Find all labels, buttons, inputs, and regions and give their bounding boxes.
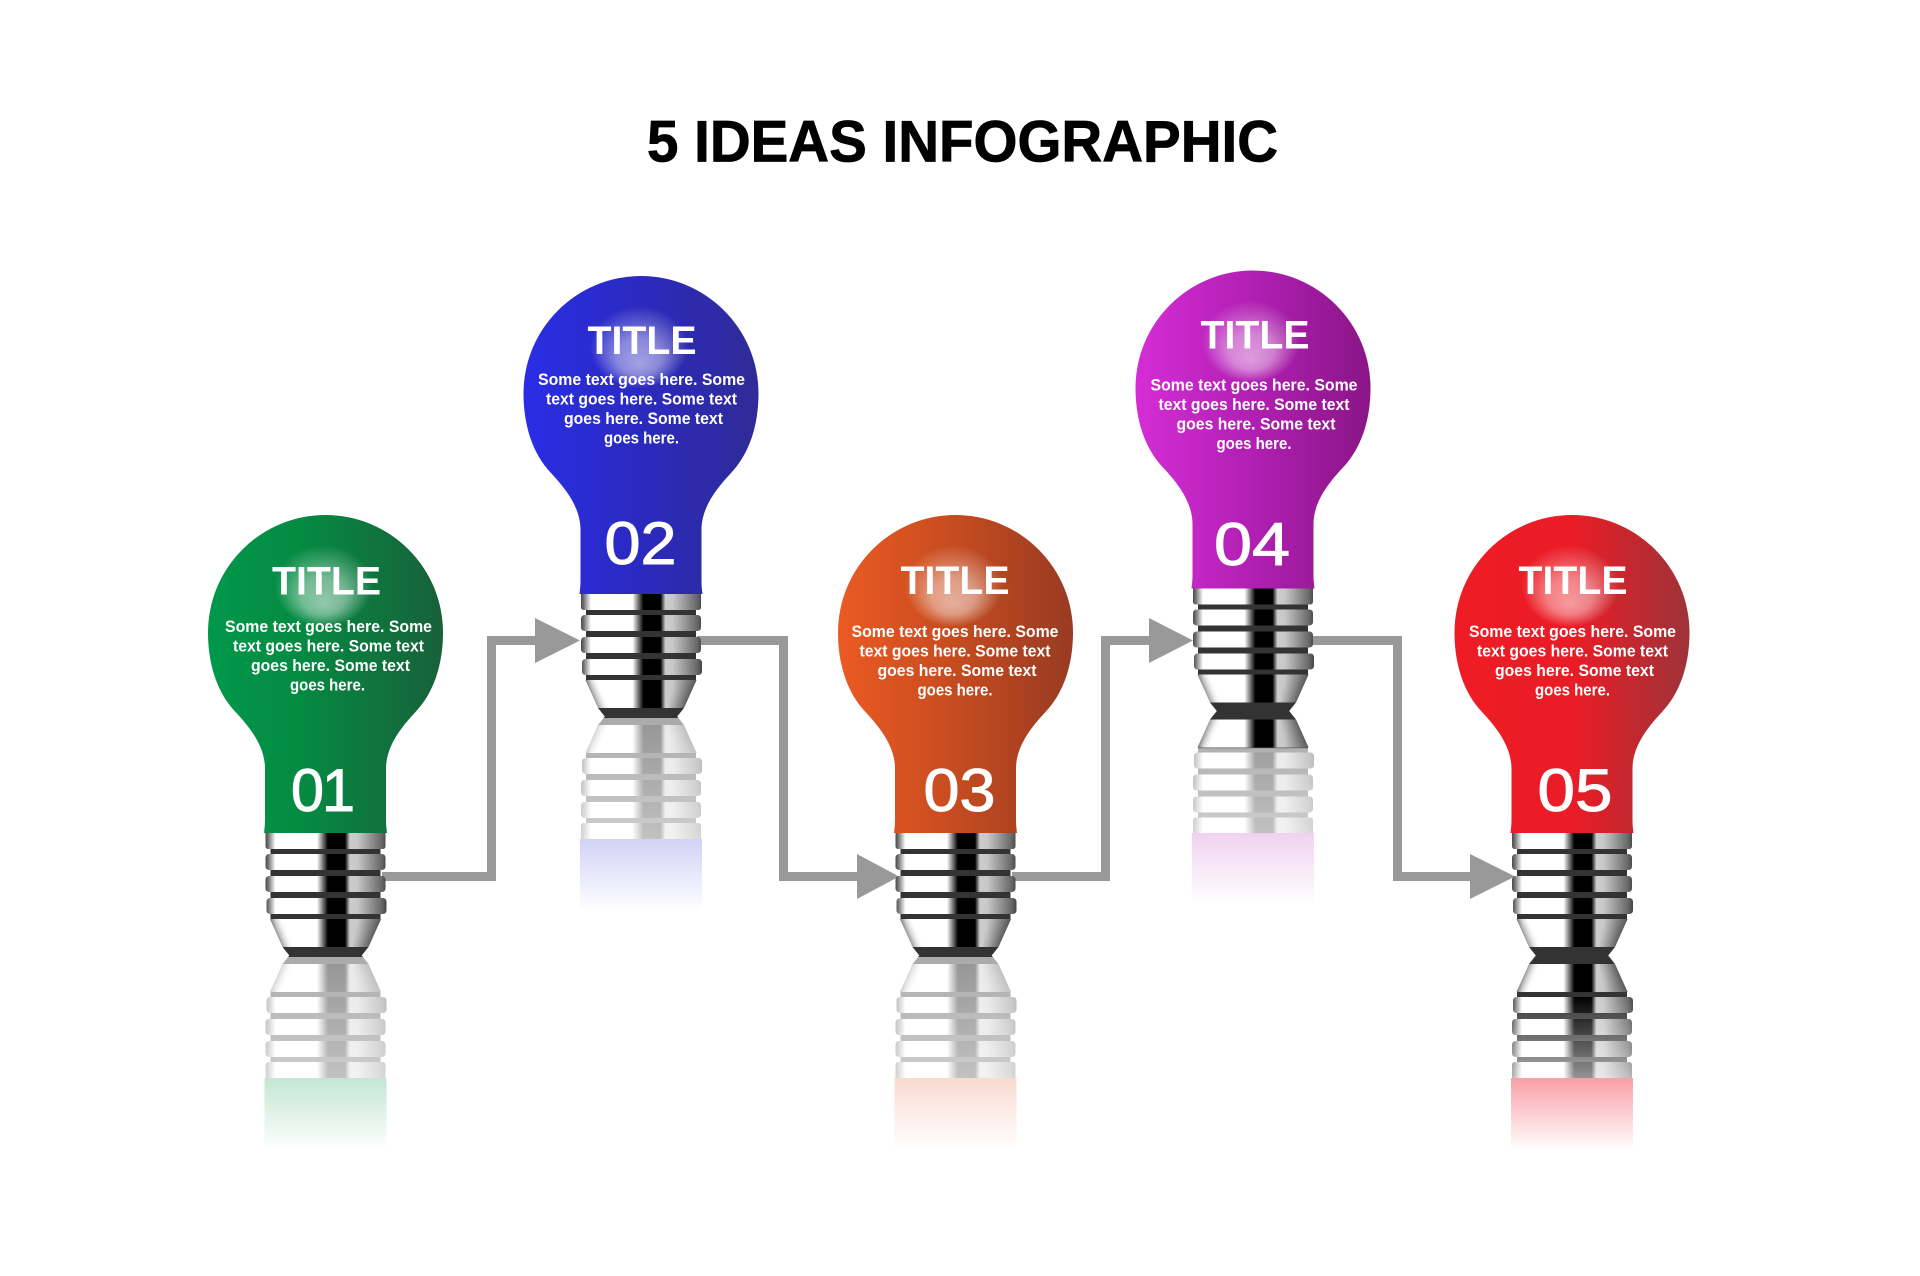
bulb 04 body text: goes here.	[1216, 435, 1292, 453]
bulb 02: blue	[524, 276, 758, 911]
bulb 05 body text	[1469, 623, 1676, 700]
bulb 01: green	[208, 515, 443, 1150]
reflection of bulb 04	[1191, 710, 1315, 905]
reflection of bulb 03	[894, 954, 1018, 1150]
reflection of bulb 02	[579, 715, 703, 911]
bulb 03 body text: Some text goes here. Some	[852, 623, 1058, 641]
bulb 03 body text: text goes here. Some text	[860, 642, 1051, 660]
bulb 05 body text: Some text goes here. Some	[1469, 623, 1676, 641]
bulb 03: orange	[838, 515, 1073, 1150]
bulb 03 body text	[852, 623, 1058, 700]
bulb 04 body text: goes here. Some text	[1176, 416, 1336, 434]
bulb 04 heading: TITLE	[1200, 314, 1310, 358]
number 02: 02	[604, 510, 676, 577]
bulb 04 body and screw base	[1136, 271, 1370, 712]
bulb 05 body text: text goes here. Some text	[1477, 642, 1668, 660]
bulb 04 body text: text goes here. Some text	[1158, 396, 1350, 414]
bulb 03 body and screw base	[838, 515, 1073, 957]
bulb 01 body text: text goes here. Some text	[233, 638, 424, 656]
bulb 01 body text: Some text goes here. Some	[225, 618, 432, 636]
bulb 01 body and screw base	[208, 515, 443, 957]
bulb 02 body text	[538, 371, 745, 448]
bulb 05 body text: goes here. Some text	[1495, 662, 1654, 680]
bulb 05 heading: TITLE	[1518, 559, 1628, 603]
bulb 02 heading: TITLE	[588, 319, 696, 363]
bulb 02 body text: text goes here. Some text	[546, 390, 737, 408]
arrow: 03 to 04	[1012, 618, 1193, 881]
bulb 01 heading: TITLE	[272, 560, 381, 604]
bulb 02 body text: Some text goes here. Some	[538, 371, 745, 389]
bulb 02 body and screw base	[524, 276, 758, 718]
bulb 01 body text	[225, 618, 432, 694]
reflection of bulb 01	[264, 954, 388, 1150]
number 04: 04	[1214, 511, 1290, 578]
bulb 03 heading: TITLE	[900, 559, 1010, 603]
bulb 04 body text	[1150, 376, 1358, 453]
bulb 02 body text: goes here. Some text	[564, 410, 723, 428]
bulb 05: red	[1454, 515, 1690, 1150]
number 01: 01	[291, 757, 353, 824]
number 03: 03	[924, 757, 996, 824]
arrow: 02 to 03	[697, 636, 899, 899]
arrow: 01 to 02	[382, 618, 580, 881]
bulb 02 body text: goes here.	[604, 430, 679, 448]
bulb 01 body text: goes here.	[290, 676, 365, 694]
bulb 04: purple	[1136, 271, 1370, 905]
bulb 05 body and screw base	[1454, 515, 1690, 957]
bulb 04 body text: Some text goes here. Some	[1150, 376, 1358, 394]
bulb 03 body text: goes here. Some text	[878, 662, 1037, 680]
bulb 05 body text: goes here.	[1535, 682, 1610, 700]
bulb 01 body text: goes here. Some text	[251, 657, 410, 675]
reflection of bulb 05	[1510, 954, 1634, 1150]
number 05: 05	[1538, 757, 1612, 824]
arrow: 04 to 05	[1310, 636, 1515, 899]
bulb 03 body text: goes here.	[918, 682, 992, 700]
title: 5 IDEAS INFOGRAPHIC	[647, 110, 1278, 174]
